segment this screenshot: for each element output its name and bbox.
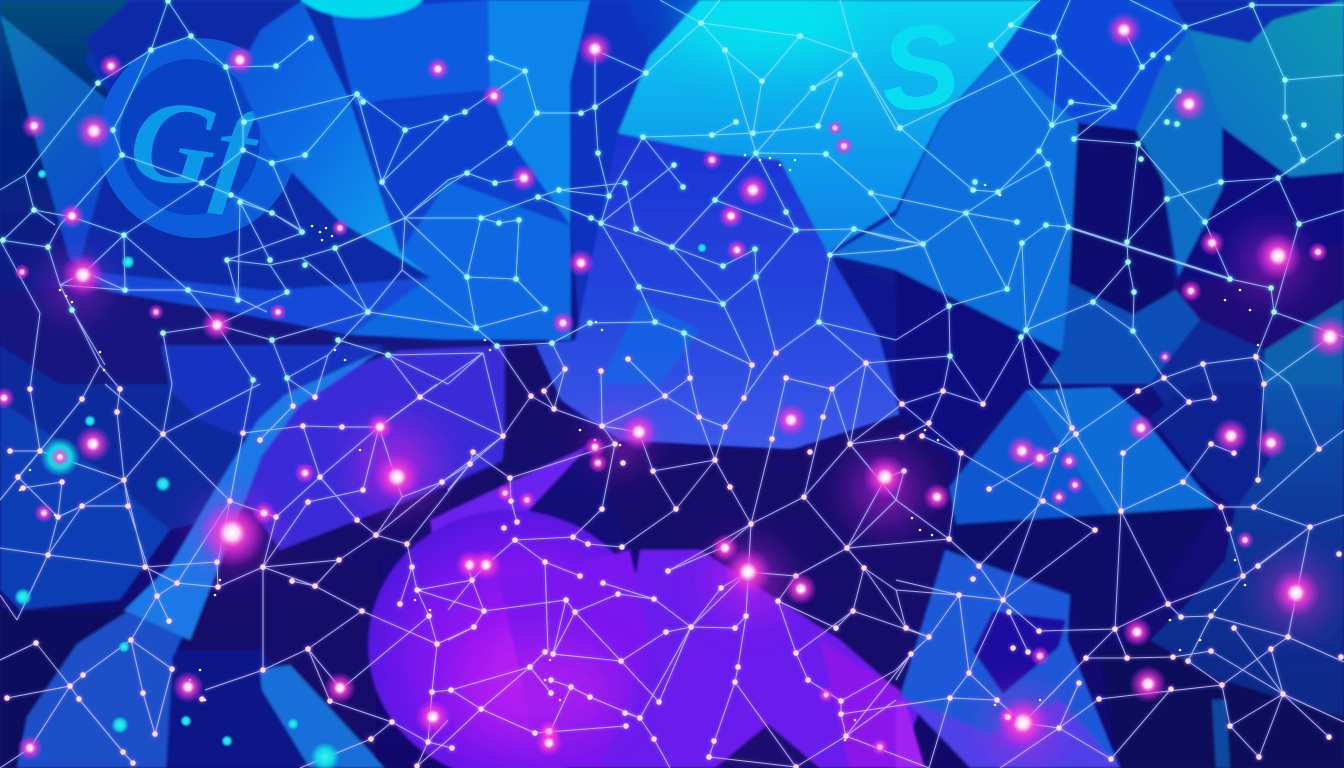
panel: upper right shapes xyxy=(830,0,1344,460)
cyan glow points xyxy=(14,169,707,768)
panel: top left dark shapes xyxy=(0,0,520,530)
network nodes: lower xyxy=(7,353,1341,767)
panel: bottom right shapes xyxy=(896,384,1344,768)
panel: middle left shapes xyxy=(0,345,520,768)
panel: upper left light shapes xyxy=(75,0,591,340)
network nodes: upper xyxy=(3,1,1338,380)
emblem: gear with glyphs xyxy=(98,38,298,238)
node clusters xyxy=(20,155,1258,740)
panel: top centre cyan shapes xyxy=(535,0,1040,450)
panel: bottom purple shapes xyxy=(368,345,950,768)
emblem: S glyph: S xyxy=(874,0,966,138)
emblem text: Gf xyxy=(122,72,275,220)
